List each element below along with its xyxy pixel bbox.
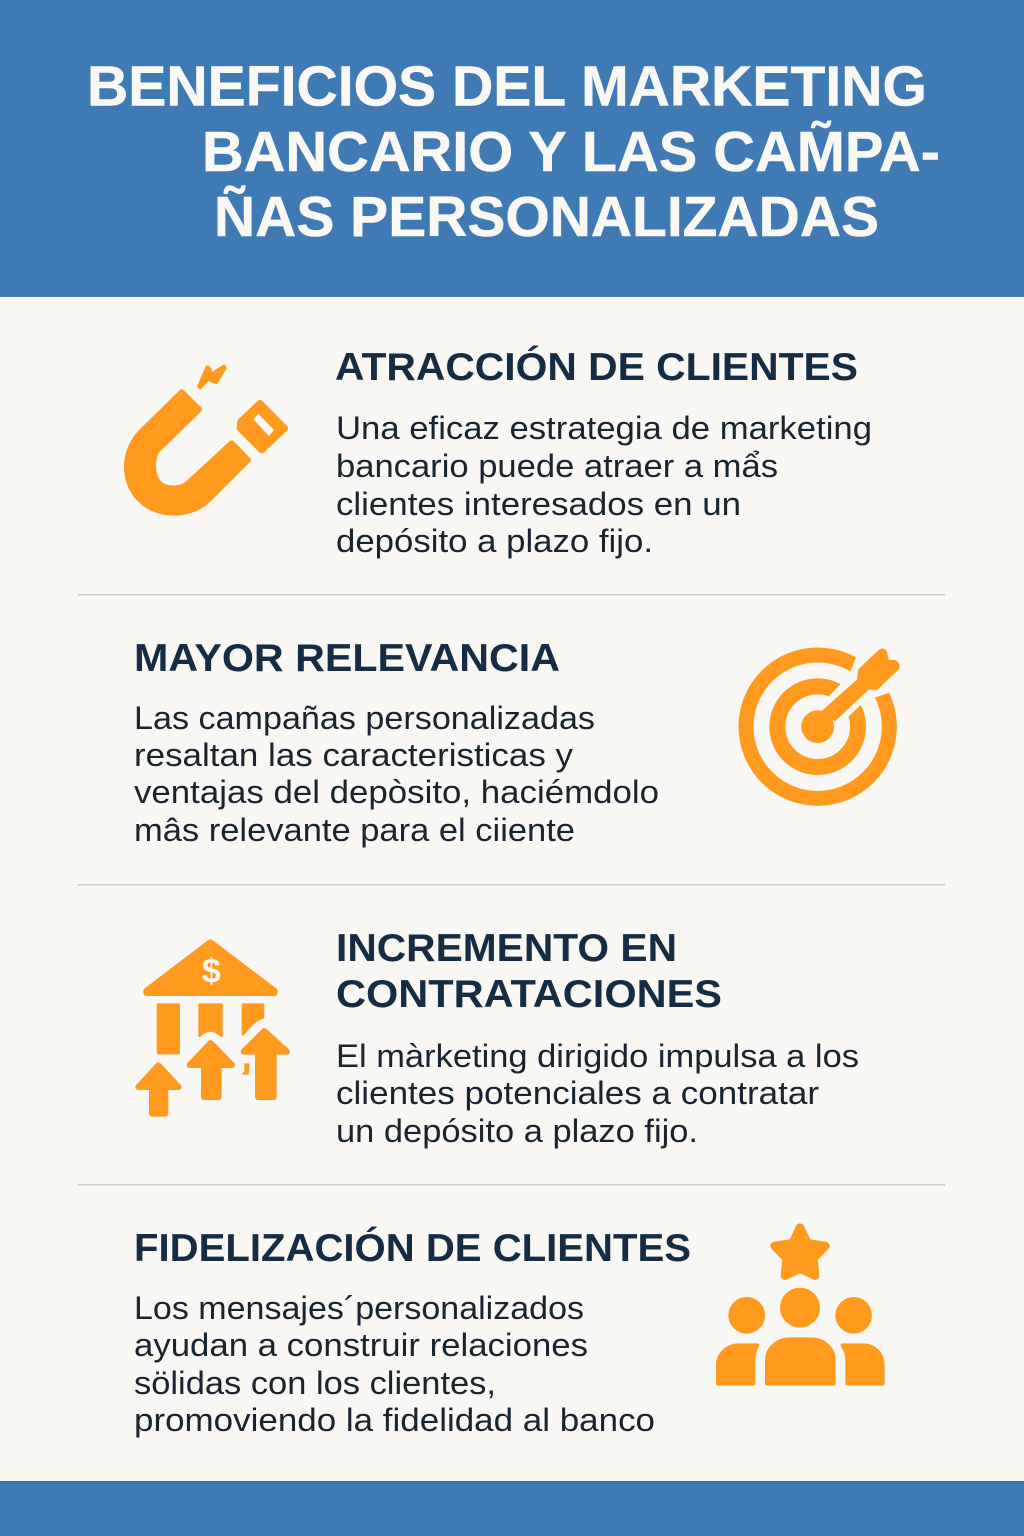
body text: resaltan las caracteristicas y — [134, 737, 574, 773]
heading: CONTRATACIONES — [336, 973, 722, 1016]
icon: bank with rising arrows — [138, 943, 287, 1114]
body text: Las campañas personalizadas — [134, 700, 595, 736]
icon: bank with rising arrows: $ — [202, 952, 221, 990]
panel: mayor relevancia — [134, 637, 910, 848]
title: BENEFICIOS DEL MARKETING — [87, 54, 927, 118]
body text — [134, 700, 659, 848]
body text: clientes interesados en un — [336, 486, 741, 522]
panel: atracción de clientes — [127, 345, 872, 559]
icon: magnet — [127, 367, 285, 513]
body text: promoviendo la fidelidad al banco — [134, 1402, 655, 1438]
title — [87, 54, 940, 249]
body text — [336, 410, 872, 559]
body text: Una eficaz estrategia de marketing — [336, 410, 872, 446]
body text: ayudan a construir relaciones — [134, 1327, 588, 1363]
icon: target with arrow — [746, 648, 910, 798]
heading — [336, 927, 722, 1016]
icon: customers with star — [718, 1228, 883, 1384]
heading: INCREMENTO EN — [336, 927, 677, 970]
title: BANCARIO Y LAS CAM̃PA- — [202, 120, 940, 184]
panel: fidelización de clientes — [134, 1226, 883, 1438]
body text: El màrketing dirigido impulsa a los — [336, 1038, 859, 1074]
body text: ventajas del depòsito, haciémdolo — [134, 774, 659, 810]
footer band — [0, 1481, 1024, 1536]
heading: FIDELIZACIÓN DE CLIENTES — [134, 1226, 691, 1270]
body text: clientes potenciales a contratar — [336, 1075, 819, 1111]
body text: bancario puede atraer a mẩs — [336, 448, 778, 484]
heading: MAYOR RELEVANCIA — [134, 637, 560, 680]
body text: mâs relevante para el ciiente — [134, 812, 575, 848]
body text: sölidas con los clientes, — [134, 1365, 496, 1401]
body text: depósito a plazo fijo. — [336, 523, 653, 559]
heading: ATRACCIÓN DE CLIENTES — [335, 345, 858, 389]
body text: un depósito a plazo fijo. — [336, 1113, 698, 1149]
title: ÑAS PERSONALIZADAS — [214, 185, 879, 249]
header banner — [0, 0, 1024, 297]
body text: Los mensajes´personalizados — [134, 1290, 584, 1326]
body text — [336, 1038, 859, 1149]
panel: incremento en contrataciones — [138, 927, 859, 1149]
body text — [134, 1290, 655, 1438]
